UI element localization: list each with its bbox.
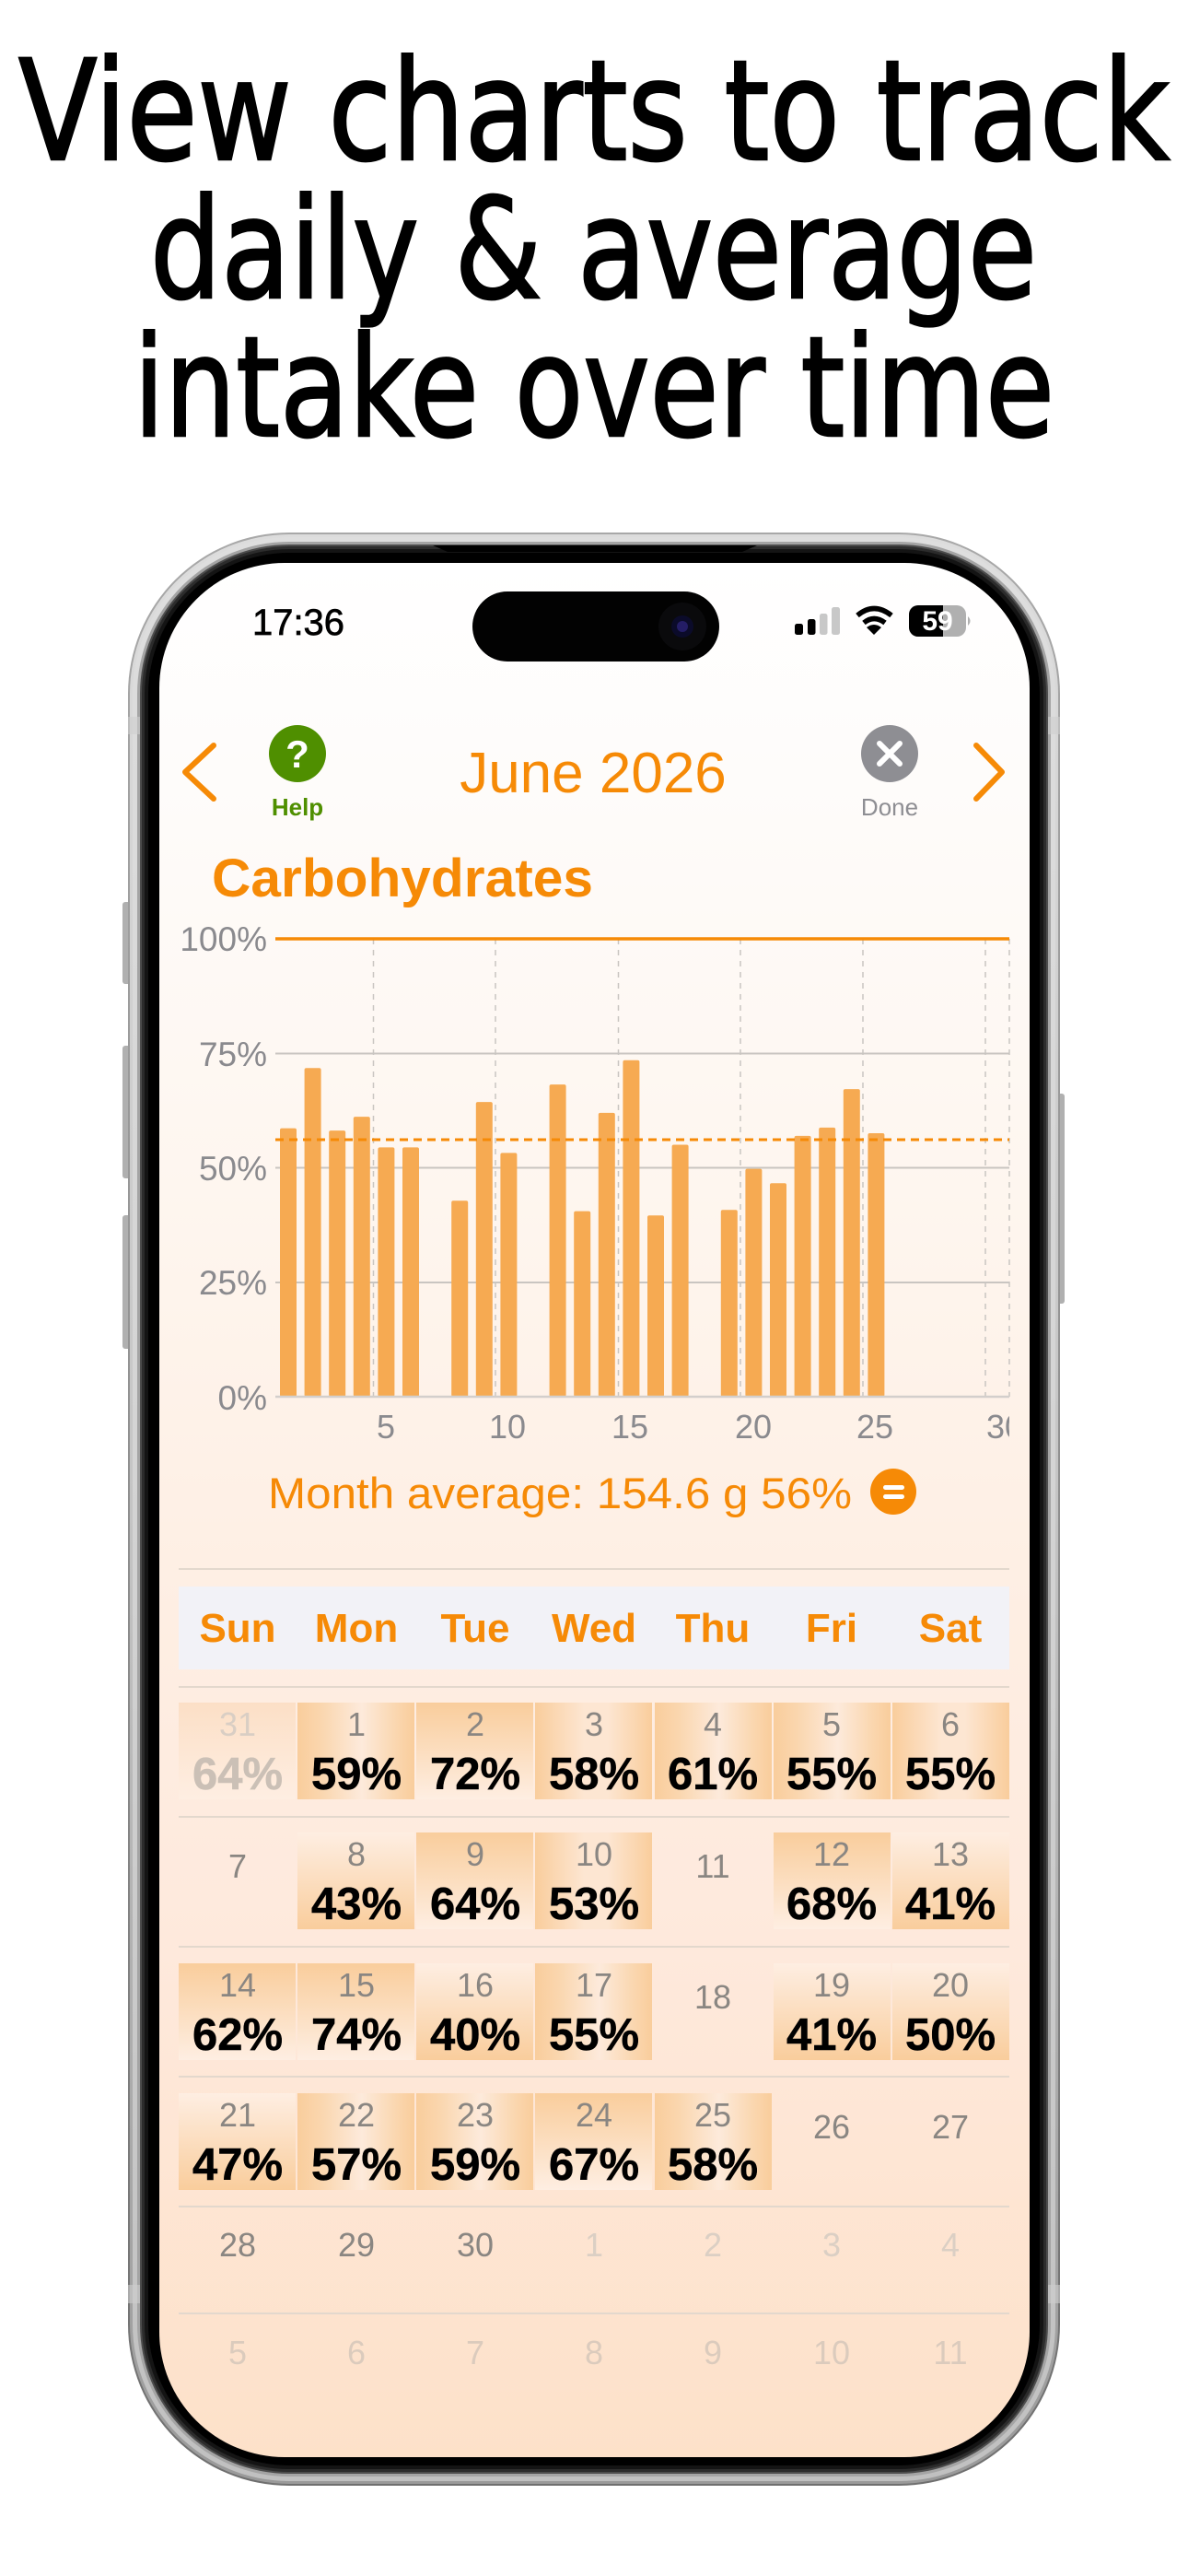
help button: ? [285,732,309,776]
phone device [122,533,1065,2486]
calendar week 6: 11 [933,2334,968,2371]
calendar week 3: 55% [549,2010,639,2060]
calendar week 3: 20 [932,1966,969,2004]
screen background [159,563,1030,2457]
title [18,30,1170,469]
month title: June 2026 [460,742,727,805]
help button [269,725,326,821]
calendar week 3: 18 [694,1978,731,2016]
x axis labels: 15 [611,1408,648,1446]
calendar week 4: 27 [932,2108,969,2146]
calendar week 1 [179,1703,1009,1799]
done button [861,725,918,821]
calendar week 1: 59% [311,1750,402,1799]
signal bars [795,607,840,635]
navigation header [185,725,1002,821]
weekday header: Wed [552,1606,636,1651]
calendar week 2: 9 [466,1835,484,1873]
calendar week 5: 28 [219,2226,256,2264]
calendar week 1: 1 [347,1705,366,1743]
calendar week 2: 53% [549,1879,639,1929]
calendar week 2: 11 [695,1847,730,1885]
calendar week 6: 8 [585,2334,603,2371]
calendar week 2: 68% [786,1879,877,1929]
calendar week 4: 47% [192,2140,283,2190]
wifi icon [857,608,891,635]
done button: Done [861,793,918,821]
calendar week 2: 13 [932,1835,969,1873]
calendar week 1: 5 [822,1705,841,1743]
battery: 59 [922,606,953,637]
calendar week 4: 58% [668,2140,758,2190]
calendar week 1: 55% [905,1750,996,1799]
y axis labels: 100% [180,920,267,958]
goal line at 100% [275,937,1009,941]
calendar week 6: 9 [704,2334,722,2371]
clock: 17:36 [252,603,344,643]
calendar week 2: 7 [228,1847,247,1885]
status bar [252,591,971,662]
dynamic island [472,591,719,662]
calendar week 6: 5 [228,2334,247,2371]
calendar week 3: 19 [813,1966,850,2004]
phone frame [128,533,1060,2486]
calendar week 4: 25 [694,2096,731,2134]
calendar week 1: 6 [941,1705,960,1743]
calendar week 3: 16 [457,1966,494,2004]
calendar week 4: 21 [219,2096,256,2134]
calendar week 2: 64% [430,1879,520,1929]
calendar week 4: 24 [576,2096,612,2134]
calendar week 2: 43% [311,1879,402,1929]
calendar week 5: 2 [704,2226,722,2264]
x axis labels: 30 [986,1408,1023,1446]
calendar week 3: 17 [576,1966,612,2004]
y axis labels: 75% [199,1036,267,1073]
battery [909,605,971,637]
calendar week 4: 22 [338,2096,375,2134]
calendar week 3: 15 [338,1966,375,2004]
calendar week 2: 12 [813,1835,850,1873]
x axis labels: 25 [856,1408,893,1446]
x axis labels: 10 [489,1408,526,1446]
x axis labels: 20 [735,1408,772,1446]
y axis labels: 0% [218,1379,267,1417]
y axis labels: 50% [199,1150,267,1188]
average dashed line [275,1139,1009,1141]
weekday header: Thu [676,1606,750,1651]
help button: Help [272,793,323,821]
weekday header: Mon [315,1606,398,1651]
calendar week 1: 31 [219,1705,256,1743]
calendar week 5: 1 [585,2226,603,2264]
calendar week 1: 2 [466,1705,484,1743]
y axis labels: 25% [199,1264,267,1302]
calendar week 1: 58% [549,1750,639,1799]
weekday header: Sun [199,1606,276,1651]
calendar week 3: 14 [219,1966,256,2004]
bar chart [180,920,1023,1446]
calendar week 3: 62% [192,2010,283,2060]
arrow: previous month [185,745,214,799]
calendar week 1: 3 [585,1705,603,1743]
calendar week 5: 4 [941,2226,960,2264]
calendar week 3 [179,1963,1009,2060]
calendar week 5: 29 [338,2226,375,2264]
calendar week 2 [228,1832,1009,1929]
arrow: next month [976,745,1002,799]
y axis labels [180,920,267,1417]
calendar week 4 [179,2093,969,2190]
weekday header: Sat [919,1606,983,1651]
weekday header: Tue [441,1606,509,1651]
x axis labels [378,1415,1009,1439]
calendar week 5: 30 [457,2226,494,2264]
calendar week 3: 74% [311,2010,402,2060]
calendar week 3: 50% [905,2010,996,2060]
calendar week 6: 6 [347,2334,366,2371]
calendar week 3: 40% [430,2010,520,2060]
calendar week 1: 55% [786,1750,877,1799]
daily bars [280,1060,884,1397]
calendar week 2: 8 [347,1835,366,1873]
calendar week 6: 7 [466,2334,484,2371]
weekday header [179,1587,1009,1669]
x axis line [275,1396,1009,1398]
separators [179,1569,1009,2313]
calendar week 4: 23 [457,2096,494,2134]
icon: equals badge [870,1469,916,1515]
calendar week 6 [228,2334,968,2371]
x axis labels: 5 [377,1408,395,1446]
calendar week 4: 67% [549,2140,639,2190]
side buttons [122,902,1065,1349]
calendar week 1: 61% [668,1750,758,1799]
calendar week 1: 4 [704,1705,722,1743]
month average: Month average: 154.6 g 56% [268,1469,852,1517]
calendar week 1: 64% [192,1750,283,1799]
calendar week 4: 57% [311,2140,402,2190]
calendar week 4: 26 [813,2108,850,2146]
calendar week 6: 10 [813,2334,850,2371]
weekday header: Fri [806,1606,857,1651]
calendar week 4: 59% [430,2140,520,2190]
calendar week 2: 41% [905,1879,996,1929]
calendar week 5 [219,2226,960,2264]
calendar week 1: 72% [430,1750,520,1799]
calendar week 3: 41% [786,2010,877,2060]
calendar week 2: 10 [576,1835,612,1873]
chart heading: Carbohydrates [212,849,593,908]
calendar week 5: 3 [822,2226,841,2264]
